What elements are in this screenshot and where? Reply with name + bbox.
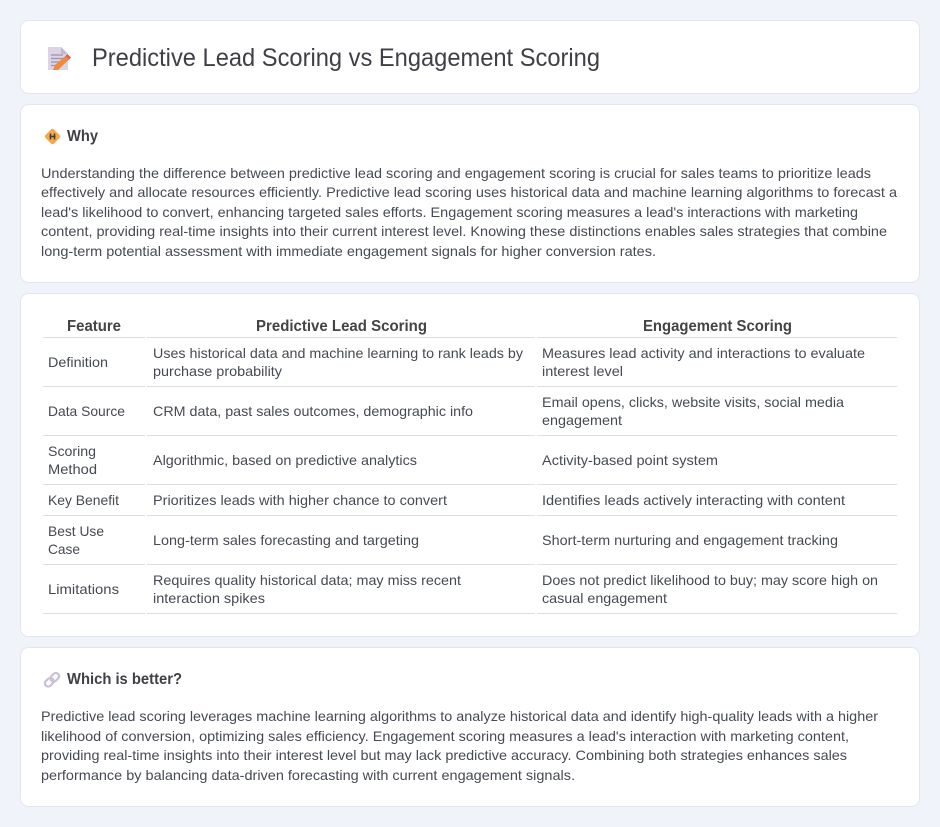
panel: which is better <box>20 648 920 806</box>
icon: link <box>44 672 60 688</box>
table row: definition: Definition <box>48 354 108 370</box>
table row: data source <box>48 394 844 428</box>
table row: best use case: Long-term sales forecasting and targeting <box>153 532 419 548</box>
heading: why: Why <box>67 128 98 145</box>
text block: which is better paragraph: Predictive lead scoring leverages machine learning algorithms to analyze historical data and identify high-quality leads with a higher <box>41 708 878 724</box>
table header row: Feature <box>67 318 121 335</box>
text block: which is better paragraph: performance by balancing data-driven forecasting with current engagement signals. <box>41 767 575 783</box>
table row: key benefit <box>48 492 845 508</box>
panel: header <box>20 20 920 94</box>
table row: data source: engagement <box>542 412 622 428</box>
table row: limitations: Does not predict likelihood to buy; may score high on <box>542 572 878 588</box>
table row: scoring method: Activity-based point system <box>542 452 718 468</box>
text block: why paragraph: long-term potential assessment with immediate engagement signals for higher conversion rates. <box>41 243 656 259</box>
panel: comparison table <box>20 294 920 636</box>
table row: definition: interest level <box>542 363 623 379</box>
table row: data source: CRM data, past sales outcomes, demographic info <box>153 403 473 419</box>
table header row <box>67 318 792 335</box>
text block: why paragraph: Understanding the difference between predictive lead scoring and engagement scoring is crucial for sales teams to prioritize leads <box>41 165 871 181</box>
table row: limitations: Limitations <box>48 581 119 597</box>
table row: best use case: Best Use <box>48 523 104 539</box>
icon: memo with pencil <box>48 47 71 70</box>
table row: scoring method: Method <box>48 461 97 477</box>
table row: definition: Uses historical data and machine learning to rank leads by <box>153 345 523 361</box>
text block: why paragraph <box>41 165 897 259</box>
table row: key benefit: Key Benefit <box>48 492 119 508</box>
table row: key benefit: Identifies leads actively interacting with content <box>542 492 845 508</box>
table row: best use case: Case <box>48 541 80 557</box>
table row: definition: Measures lead activity and interactions to evaluate <box>542 345 865 361</box>
table header row: Engagement Scoring <box>643 318 792 335</box>
text block: which is better paragraph: providing real-time insights into their interest level but may lack predictive accuracy. Combining both strategies enhances sales <box>41 747 847 763</box>
title: Predictive Lead Scoring vs Engagement Scoring <box>92 44 600 72</box>
text block: why paragraph: lead's likelihood to convert, enhancing targeted sales efforts. Engagement scoring measures a lead's interactions with marketing <box>41 204 858 220</box>
panel: why <box>20 104 920 282</box>
table row: data source: Data Source <box>48 403 125 419</box>
table row: limitations <box>48 572 878 606</box>
heading: which is better: Which is better? <box>67 671 182 688</box>
table row: limitations: Requires quality historical data; may miss recent <box>153 572 461 588</box>
table row: limitations: interaction spikes <box>153 590 265 606</box>
table row: definition: purchase probability <box>153 363 282 379</box>
table row: definition <box>48 345 865 379</box>
table header row: Predictive Lead Scoring <box>256 318 427 335</box>
icon: warning diamond <box>44 128 61 145</box>
table row: scoring method <box>48 443 718 477</box>
table row: limitations: casual engagement <box>542 590 667 606</box>
table row: best use case: Short-term nurturing and engagement tracking <box>542 532 838 548</box>
text block: which is better paragraph <box>41 708 878 783</box>
table row: data source: Email opens, clicks, website visits, social media <box>542 394 844 410</box>
table row: best use case <box>48 523 838 557</box>
text block: why paragraph: content, providing real-time insights into their current interest level. Knowing these distinctions enables sales strategies that combine <box>41 223 887 239</box>
table row: scoring method: Algorithmic, based on predictive analytics <box>153 452 417 468</box>
text block: which is better paragraph: likelihood of conversion, optimizing sales efficiency. Engagement scoring measures a lead's interaction with marketing content, <box>41 728 849 744</box>
table row: scoring method: Scoring <box>48 443 96 459</box>
table row: key benefit: Prioritizes leads with higher chance to convert <box>153 492 447 508</box>
text block: why paragraph: effectively and allocate resources efficiently. Predictive lead scoring uses historical data and machine learning algorithms to forecast a <box>41 184 897 200</box>
